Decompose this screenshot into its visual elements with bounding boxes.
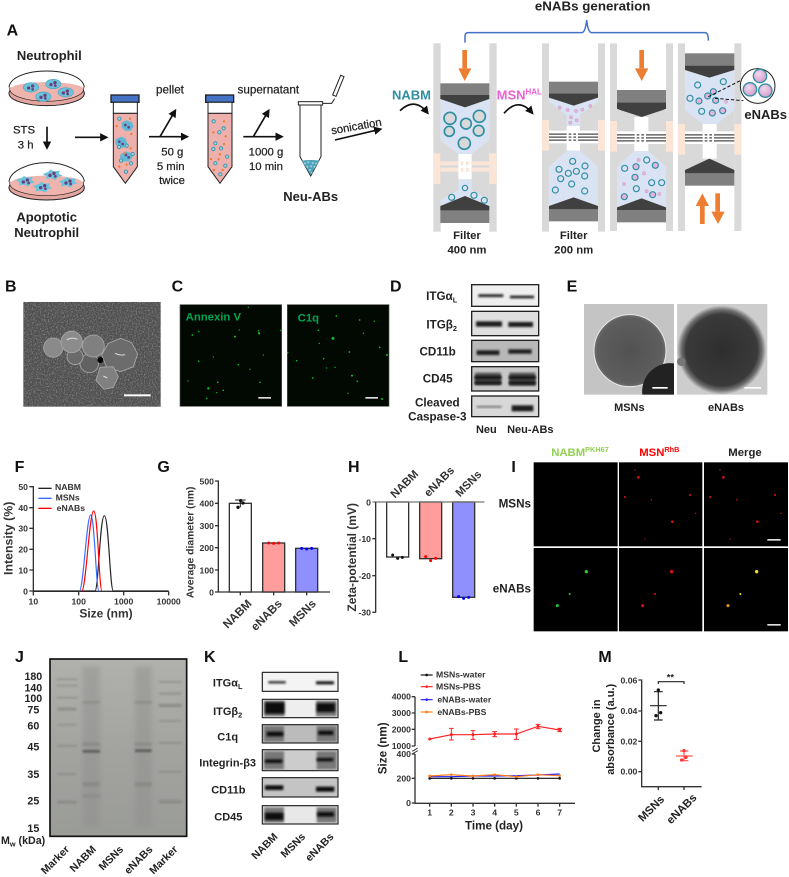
protein labels: L: [453, 295, 458, 304]
NABM label: NABM: [392, 87, 431, 102]
captions: MSNs: [614, 402, 645, 414]
lane labels: [249, 831, 336, 864]
panel label I: I: [511, 459, 516, 476]
bar chart: zeta potential: MSNs: [454, 469, 484, 499]
protein labels: [199, 678, 256, 823]
dot plot: change in absorbance: 0.04: [620, 706, 638, 716]
row labels: [493, 497, 531, 596]
protein labels: Caspase-3: [408, 411, 467, 424]
column titles: RhB: [664, 445, 679, 454]
TEM image: eNABs: [677, 304, 767, 395]
protein labels: CD11b: [211, 785, 246, 797]
line chart: Time (day): [465, 819, 523, 832]
lane labels: MSNs: [97, 844, 126, 873]
column titles: MSN: [639, 447, 664, 459]
protein labels: [408, 290, 467, 424]
bracket: [465, 20, 708, 43]
fluorescence image: Annexin V: Annexin V: [186, 312, 241, 324]
axis unit: w: [9, 839, 16, 848]
axis unit: M: [1, 835, 10, 847]
bar chart: average diameter: MSNs: [287, 597, 319, 629]
bar chart: average diameter: 100: [200, 565, 214, 575]
filter extrusion step: [610, 43, 673, 231]
panel label K: K: [204, 649, 216, 666]
bar chart: average diameter: 300: [200, 521, 214, 531]
arrow: to first tube: [75, 135, 106, 140]
line chart: 50: [18, 482, 28, 492]
sonication label: sonication: [330, 117, 383, 137]
legend: [421, 670, 492, 717]
panel label F: F: [15, 459, 25, 476]
gel image: [50, 659, 187, 836]
line chart: 20: [18, 545, 28, 555]
dot plot: change in absorbance: **: [667, 673, 674, 683]
panel label G: G: [157, 459, 170, 476]
magnified eNABs inset: [708, 69, 775, 103]
protein labels: CD45: [214, 811, 242, 823]
line chart: [377, 692, 575, 832]
column titles: [551, 445, 762, 459]
icon: neutrophil dish: [9, 71, 84, 106]
bar chart: zeta potential: NABM: [389, 468, 421, 501]
panel H: zeta potential: [345, 445, 788, 631]
axis unit: (kDa): [16, 835, 46, 847]
line chart: 4: [492, 807, 497, 817]
curved arrow NABM: [400, 104, 427, 113]
column titles: PKH67: [585, 445, 609, 454]
protein labels: C1q: [217, 732, 238, 744]
lane labels: MSNs: [279, 831, 308, 860]
label: Filter 200 nm: 200 nm: [554, 244, 593, 256]
lane labels: [39, 844, 180, 877]
dot plot: change in absorbance: 0.06: [620, 675, 638, 685]
panel J: protein gel: [1, 649, 338, 877]
line chart: 4000: [392, 692, 411, 702]
panel B: SEM image: [5, 278, 389, 407]
captions: eNABs: [708, 402, 744, 414]
protein labels: CD45: [423, 373, 453, 386]
heading: Apoptotic Neutrophil: Apoptotic: [16, 209, 77, 224]
protein labels: Integrin-β3: [199, 757, 256, 769]
line chart: 0: [406, 798, 411, 808]
SEM micrograph: [23, 302, 161, 407]
fluorescence image: Annexin V: [180, 305, 282, 406]
icon: apoptotic neutrophil dish: [9, 163, 84, 200]
panel A: extrusion filter process: [392, 0, 787, 256]
icon: tube with particles: [206, 95, 234, 183]
icon: tube with cells and debris: [111, 95, 139, 183]
dot plot: change in absorbance: eNABs: [665, 792, 699, 827]
panel D: western blot: [390, 278, 767, 436]
lane labels: Marker: [39, 844, 72, 877]
line chart: 200: [397, 773, 411, 783]
legend: MSNs-water: [436, 670, 486, 680]
line chart: 5: [514, 807, 519, 817]
panel label E: E: [567, 278, 578, 295]
text: STS 3 h: STS: [13, 125, 35, 137]
line chart: MSNs: [56, 492, 80, 502]
captions: [614, 402, 744, 414]
label: Filter 200 nm: Filter: [560, 230, 588, 242]
molecular weight labels: 140: [24, 682, 42, 694]
molecular weight labels: 60: [27, 720, 39, 732]
line chart: [2, 482, 181, 621]
protein labels: L: [238, 682, 243, 691]
bar chart: average diameter: NABM: [221, 597, 254, 631]
line chart: 40: [18, 503, 28, 513]
label: Filter 400 nm: 400 nm: [447, 244, 487, 256]
protein labels: Cleaved: [415, 396, 460, 409]
heading: Apoptotic Neutrophil: Neutrophil: [14, 225, 79, 240]
bar chart: zeta potential: -10: [358, 534, 371, 544]
bar chart: zeta potential: -20: [358, 571, 371, 581]
line chart: 3000: [392, 708, 411, 718]
lane labels: [476, 424, 554, 436]
column titles: NABM: [551, 447, 585, 459]
MSN HAL label: HAL: [526, 88, 542, 97]
bar chart: average diameter: 200: [200, 543, 214, 553]
dot plot: change in absorbance: absorbance (a.u.): [605, 684, 617, 775]
bar chart: zeta potential: -30: [358, 608, 371, 618]
bar chart: average diameter: 400: [200, 499, 214, 509]
text: 1000 g 10 min: 10 min: [249, 161, 283, 173]
text: pellet: pellet: [156, 83, 185, 96]
filter repeat extrusion step: [678, 43, 741, 231]
text: supernatant: supernatant: [238, 83, 300, 96]
panel label A: A: [7, 22, 19, 39]
protein labels: ITGβ: [213, 706, 238, 718]
line chart: 1: [427, 807, 432, 817]
molecular weight labels: 180: [24, 671, 42, 683]
filter 200 nm unit: [542, 43, 605, 232]
arrow: supernatant split: [243, 111, 281, 137]
column titles: Merge: [728, 447, 762, 459]
line chart: NABM: [55, 482, 81, 492]
molecular weight labels: 25: [27, 795, 39, 807]
neu-ABs label: Neu-ABs: [283, 189, 338, 204]
line chart: 30: [18, 524, 28, 534]
panel label C: C: [172, 278, 184, 295]
dot plot: change in absorbance: Change in: [591, 699, 603, 753]
panel label D: D: [390, 278, 402, 295]
curved arrow MSN: [504, 105, 532, 113]
heading: Neutrophil: Neutrophil: [17, 48, 82, 63]
line chart: 1000: [114, 596, 133, 606]
text: 50 g 5 min twice: 5 min: [157, 161, 185, 173]
lane labels: NABM: [249, 831, 281, 862]
panel A: neutrophil apoptotic body isolation: [7, 22, 383, 240]
molecular weight labels: 75: [27, 704, 39, 716]
microscopy grid: [534, 462, 788, 631]
TEM image: MSNs: [584, 304, 674, 395]
line chart: Intensity (%): [2, 502, 16, 575]
dot plot: change in absorbance: [591, 673, 702, 827]
molecular weight labels: 35: [27, 769, 39, 781]
fluorescence image: C1q: C1q: [298, 313, 319, 325]
row labels: MSNs: [499, 497, 531, 510]
lane labels: Marker: [147, 844, 180, 877]
legend: eNABs-PBS: [437, 707, 487, 717]
molecular weight labels: 15: [27, 823, 39, 835]
line chart: 0: [23, 586, 28, 596]
line chart: 1000: [392, 741, 411, 751]
text: 50 g 5 min twice: twice: [159, 175, 185, 187]
panel label J: J: [15, 649, 24, 666]
line chart: 100: [71, 596, 86, 606]
panel F: DLS size distribution: [2, 459, 330, 633]
line chart: 6: [536, 807, 541, 817]
blot rows: [472, 285, 539, 417]
line chart: Size (nm): [79, 607, 133, 621]
label: eNABs: eNABs: [744, 107, 787, 122]
panel L: stability line chart: [377, 649, 702, 832]
bar chart: average diameter: 0: [209, 587, 214, 597]
dot plot: change in absorbance: 0.02: [620, 736, 638, 746]
line chart: 400: [397, 749, 411, 759]
row labels: eNABs: [493, 583, 531, 596]
bar chart: zeta potential: eNABs: [422, 465, 457, 499]
western blot rows: [262, 672, 338, 824]
bar chart: zeta potential: 0: [366, 497, 371, 507]
dot plot: change in absorbance: 0.00: [620, 767, 638, 777]
legend: eNABs-water: [437, 694, 492, 704]
line chart: 10: [18, 565, 28, 575]
text: STS 3 h: 3 h: [18, 139, 34, 151]
panel label M: M: [598, 649, 612, 666]
dot plot: change in absorbance: MSNs: [636, 794, 667, 824]
bar chart: zeta potential: [345, 465, 484, 618]
line chart: 10: [29, 596, 38, 606]
lane labels: eNABs: [122, 844, 155, 877]
protein labels: ITGα: [426, 290, 453, 303]
MSN HAL label: MSN: [497, 87, 526, 102]
line chart: 7: [557, 807, 562, 817]
line chart: 2: [449, 807, 454, 817]
arrow: STS treatment: [44, 127, 49, 147]
arrow: sonication: [335, 129, 380, 140]
bar chart: average diameter: Average diameter (nm): [186, 487, 197, 598]
line chart: Size (nm): [377, 722, 390, 774]
bar chart: zeta potential: Zeta-potential (mV): [345, 503, 359, 612]
icon: eppendorf tube with Neu-ABs: [298, 75, 344, 176]
molecular weight labels: 45: [27, 741, 39, 753]
text: 1000 g 10 min: 1000 g: [249, 147, 283, 159]
lane labels: NABM: [68, 844, 99, 875]
protein labels: ITGβ: [426, 319, 453, 332]
line chart: 10000: [157, 596, 181, 606]
lane labels: eNABs: [303, 831, 336, 864]
panel label H: H: [348, 459, 360, 476]
text: 50 g 5 min twice: 50 g: [161, 147, 183, 159]
filter 400 nm unit: [433, 43, 497, 232]
protein labels: CD11b: [420, 345, 456, 358]
protein labels: 2: [453, 324, 457, 333]
panel label L: L: [398, 649, 408, 666]
line chart: 2000: [392, 724, 411, 734]
bar chart: average diameter: 500: [200, 476, 214, 486]
lane labels: Neu-ABs: [507, 424, 554, 436]
molecular weight labels: [24, 671, 42, 835]
fluorescence image: C1q: [287, 305, 389, 406]
molecular weight labels: 100: [24, 693, 42, 705]
line chart: 3: [471, 807, 476, 817]
bar chart: average diameter: eNABs: [249, 597, 285, 633]
label: Filter 400 nm: Filter: [453, 230, 481, 242]
protein labels: 2: [238, 710, 242, 719]
legend: MSNs-PBS: [436, 681, 481, 691]
lane labels: Neu: [476, 424, 497, 436]
protein labels: ITGα: [213, 678, 238, 690]
panel label B: B: [5, 278, 17, 295]
line chart: eNABs: [57, 503, 85, 513]
arrow: pellet split: [149, 111, 187, 137]
bar chart: average diameter: [186, 476, 330, 633]
